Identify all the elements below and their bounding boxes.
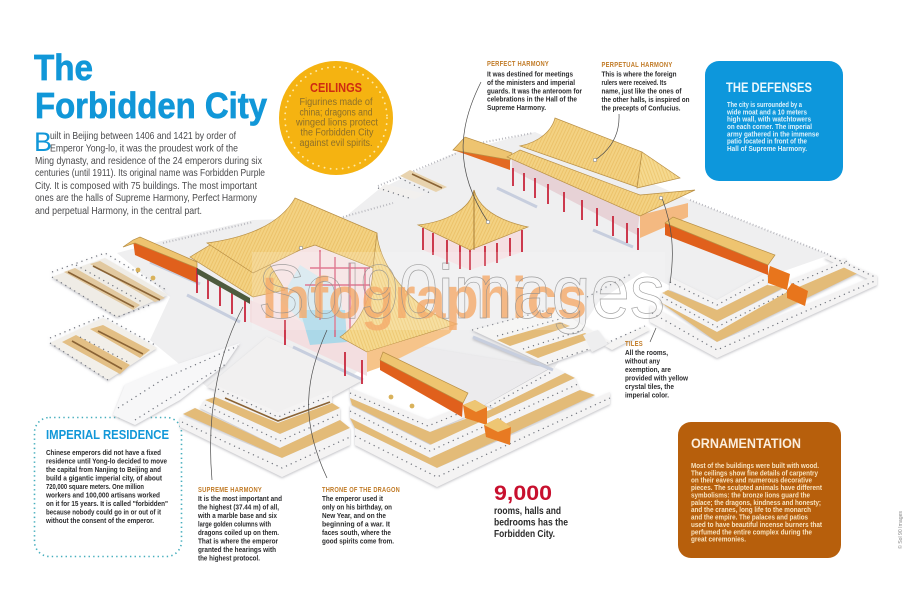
text: the defenses body: wide moat and a 10 meters — [726, 109, 807, 116]
label: supreme harmony — [197, 487, 282, 562]
text: ornamentation body: Most of the buildings were built with wood. — [691, 463, 819, 470]
label: tiles: crystal tiles, the — [625, 382, 674, 391]
upper back terrace — [378, 170, 447, 199]
stat: 9,000 rooms — [494, 482, 568, 540]
label: perfect harmony: celebrations in the Hall of the — [487, 95, 577, 104]
title: Forbidden City — [35, 85, 267, 126]
text: ornamentation body: and the empire. The palaces and patios — [691, 515, 808, 522]
ceilings text — [295, 97, 378, 149]
terraces — [50, 253, 877, 487]
text: ornamentation body: palace; the dragons, kindness and honesty; — [691, 500, 821, 507]
hall of supreme harmony — [190, 198, 457, 384]
label: perpetual harmony: rulers were received. Its — [602, 78, 667, 87]
intro text: centuries (until 1911). Its original name was Forbidden Purple — [35, 168, 265, 179]
stone bridge — [113, 343, 240, 425]
label: tiles: TILES — [625, 341, 643, 348]
text: imperial residence body: because nobody could go in or out of it — [46, 508, 162, 517]
callout: ceilings — [279, 61, 393, 175]
label: throne of the dragon: beginning of a war. It — [322, 520, 391, 528]
front colonnade — [512, 158, 640, 235]
intro text: Ming dynasty, and residence of the 24 emperors during six — [35, 156, 262, 167]
intro text: ones are the halls of Supreme Harmony, Perfect Harmony — [35, 193, 258, 204]
label: throne of the dragon: faces south, where the — [322, 528, 391, 537]
lower left roof — [190, 245, 285, 297]
label: supreme harmony: the highest (37.44 m) of all, — [198, 502, 279, 512]
title: The — [34, 47, 93, 88]
stat caption — [494, 506, 568, 540]
text: the defenses body: on each corner. The imperial — [727, 124, 812, 131]
upper roof — [520, 118, 642, 187]
text: ornamentation body — [691, 463, 823, 544]
central pavilion — [418, 190, 528, 270]
columns — [197, 268, 362, 384]
panel: the defenses — [705, 61, 843, 181]
ceilings text: china; dragons and — [300, 108, 372, 118]
drop cap: B — [34, 127, 52, 157]
title — [34, 47, 267, 126]
orange wall left — [123, 237, 197, 283]
middle right terraces — [472, 273, 650, 365]
text: ornamentation body: The ceilings show fine details of carpentry — [691, 470, 818, 477]
shadows on courtyard — [150, 188, 633, 380]
front left terrace — [180, 385, 350, 477]
label: perfect harmony: It was destined for meetings — [487, 70, 573, 78]
palace floor — [117, 132, 830, 417]
orange wall back — [453, 137, 512, 170]
label: throne of the dragon: good spirits come from. — [322, 536, 394, 546]
ceilings text: the Forbidden City — [300, 128, 374, 138]
ceilings text: winged lions protect — [295, 118, 378, 128]
text: ornamentation body: and the cranes, long life to the monarch — [691, 507, 811, 514]
watermark: Sol90images — [258, 250, 665, 335]
text: imperial residence body: Chinese emperors did not have a fixed — [46, 448, 161, 457]
central plaza front — [207, 337, 363, 412]
leader lines — [211, 82, 672, 480]
label: supreme harmony: large golden columns with — [198, 520, 271, 528]
text: the defenses body: patio located in front of the — [727, 139, 807, 146]
stat caption: Forbidden City. — [494, 529, 555, 540]
text: the defenses body: army gathered in the immense — [727, 131, 819, 138]
text: imperial residence body: on it for 15 years. It is called "forbidden" — [46, 499, 168, 508]
text: imperial residence body: without the consent of the emperor. — [45, 516, 154, 525]
label: perpetual harmony: name, just like the ones of — [602, 87, 682, 96]
colonnade floor band — [250, 300, 367, 376]
label: tiles: provided with yellow — [625, 374, 688, 382]
lion statues — [136, 268, 414, 408]
text: ornamentation body: used to have beautiful incense burners that — [691, 522, 823, 529]
text: ornamentation body: pieces. The sculpted animals have different — [691, 485, 823, 492]
heading: the defenses: THE DEFENSES — [726, 80, 812, 95]
label: perpetual harmony — [602, 62, 690, 113]
label: supreme harmony: granted the hearings with — [198, 545, 276, 554]
label: tiles: exemption, are — [625, 365, 671, 374]
text: imperial residence body — [45, 448, 168, 525]
illustration: palace complex — [50, 118, 877, 487]
label: perfect harmony: PERFECT HARMONY — [487, 61, 549, 68]
upper roof — [207, 198, 377, 273]
right terraces — [650, 255, 877, 358]
label: tiles: All the rooms, — [625, 348, 668, 357]
label: throne of the dragon: The emperor used it — [322, 494, 384, 503]
label: perfect harmony: guards. It was the anteroom for — [487, 86, 582, 95]
text: the defenses body: The city is surrounded by a — [727, 102, 802, 109]
text: imperial residence body: workers and 100,000 artisans worked — [45, 491, 160, 500]
intro text: and perpetual Harmony, in the central part. — [35, 206, 202, 217]
text: imperial residence body: build a gigantic imperial city, of about — [46, 474, 163, 483]
ceilings heading: CEILINGS — [310, 81, 362, 95]
text: imperial residence body: 720,000 square meters. One million — [46, 482, 144, 491]
heading: imperial residence: IMPERIAL RESIDENCE — [46, 427, 169, 442]
text: imperial residence body: residence until Yong-lo decided to move — [46, 456, 167, 466]
text: ornamentation body: perfumed the entire complex during the — [691, 529, 812, 536]
label: tiles: without any — [624, 356, 660, 366]
label: supreme harmony: the highest protocol. — [198, 554, 260, 562]
intro text — [34, 127, 265, 217]
lower roof — [507, 150, 695, 216]
label: supreme harmony: That is where the emperor — [198, 536, 278, 546]
label: perpetual harmony: PERPETUAL HARMONY — [602, 62, 673, 69]
label: perfect harmony — [487, 61, 582, 112]
stat: 9,000 rooms: 9,000 — [494, 482, 552, 505]
right hip roof — [637, 152, 680, 188]
label: perpetual harmony: This is where the foreign — [602, 70, 676, 79]
label: perfect harmony: of the ministers and imperial — [487, 78, 575, 87]
label: throne of the dragon: only on his birthday, on — [322, 502, 392, 512]
label: supreme harmony: with a marble base and six — [197, 511, 277, 520]
credit: © Sol 90 Images — [897, 510, 904, 549]
front right terrace — [350, 337, 610, 487]
text: the defenses body: Hall of Supreme Harmony. — [727, 146, 807, 153]
text: ornamentation body: on their eaves and numerous decorative — [691, 478, 812, 485]
hall of perpetual harmony — [507, 118, 695, 250]
heading: ornamentation: ORNAMENTATION — [691, 436, 801, 451]
intro text: Emperor Yong-lo, it was the proudest work of the — [50, 144, 238, 154]
front orange wall — [380, 352, 511, 445]
peach wall — [367, 325, 455, 372]
text: the defenses body — [726, 102, 819, 153]
label: supreme harmony: It is the most important and — [198, 494, 282, 503]
text: ornamentation body: symbolisms: the bronze lions guard the — [691, 492, 810, 500]
intro text: uilt in Beijing between 1406 and 1421 by order of — [50, 131, 236, 142]
label: perfect harmony: Supreme Harmony. — [487, 103, 546, 112]
label: supreme harmony: dragons coiled up on them. — [198, 528, 279, 537]
text: imperial residence body: the capital from Nanjing to Beijing and — [46, 465, 161, 474]
stat caption: bedrooms has the — [494, 518, 568, 528]
label: throne of the dragon: THRONE OF THE DRAGON — [322, 487, 400, 494]
intro text: City. It is composed with 75 buildings. The most important — [35, 181, 257, 192]
watermark: Infographics — [262, 266, 587, 331]
right roof — [340, 233, 457, 352]
label: throne of the dragon — [322, 487, 400, 546]
label: perpetual harmony: the precepts of Confucius. — [602, 104, 680, 113]
panel: imperial residence — [34, 418, 182, 556]
label: tiles: imperial color. — [625, 390, 669, 400]
upper left terraces — [52, 253, 168, 317]
label: supreme harmony: SUPREME HARMONY — [198, 487, 262, 494]
panel: ornamentation — [678, 422, 841, 558]
label: throne of the dragon: New Year, and on the — [322, 511, 386, 520]
back rails — [163, 133, 830, 255]
label: perpetual harmony: the other halls, is inspired on — [602, 95, 690, 104]
ceilings text: against evil spirits. — [300, 138, 372, 149]
label: tiles — [624, 341, 688, 400]
text: the defenses body: high wall, with watchtowers — [727, 117, 811, 124]
lower left terraces — [50, 316, 157, 380]
right orange wall — [665, 217, 808, 306]
text: ornamentation body: great ceremonies. — [691, 537, 746, 544]
stat caption: rooms, halls and — [494, 506, 561, 517]
interior cutaway — [253, 245, 373, 345]
ceilings text: Figurines made of — [300, 97, 373, 108]
plaza right front — [384, 345, 550, 417]
